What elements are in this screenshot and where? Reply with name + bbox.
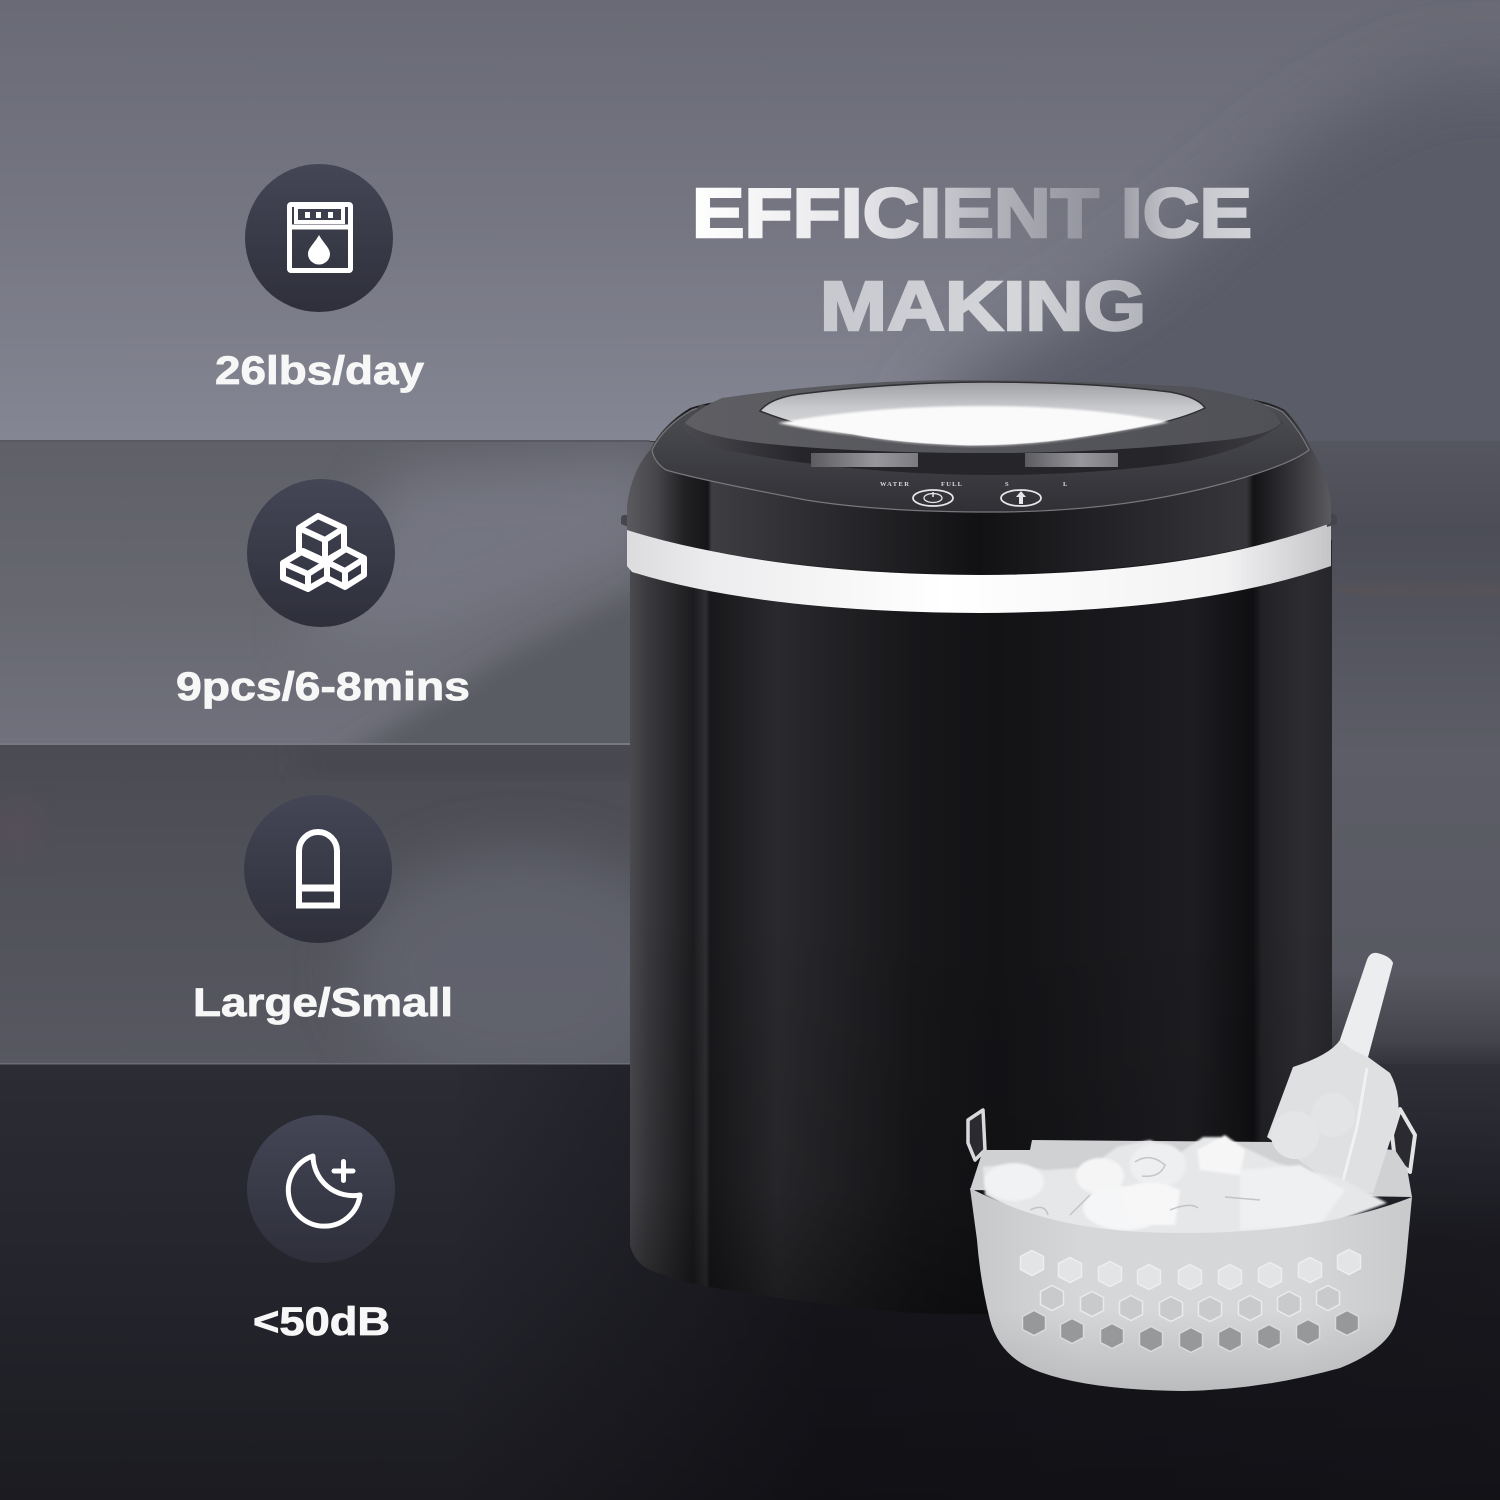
basket lower shading (970, 1188, 1412, 1391)
lid recess (683, 403, 1283, 475)
basket front (970, 1188, 1412, 1391)
feature: cube speed (176, 479, 470, 709)
label: <50dB: <50dB (253, 1300, 390, 1344)
feature: daily output (215, 164, 425, 393)
side clips (621, 514, 1337, 528)
size button (1001, 490, 1041, 506)
label: Large/Small: Large/Small (193, 981, 453, 1025)
icon: bullet-shaped ice (244, 795, 392, 943)
title: EFFICIENT ICE (692, 174, 1252, 252)
basket back rim (970, 1140, 1412, 1197)
title (692, 174, 1252, 345)
hexagon holes (1020, 1250, 1360, 1352)
feature: cube sizes (193, 795, 453, 1025)
raised lid plate (685, 380, 1281, 453)
panel labels: WATER (880, 481, 909, 488)
label: 9pcs/6-8mins: 9pcs/6-8mins (176, 665, 470, 709)
ice inside window (778, 406, 1169, 446)
feature: noise level (247, 1115, 395, 1344)
panel labels: L (1063, 481, 1068, 488)
ice cube highlights (1030, 1158, 1260, 1215)
lower panel (652, 394, 1309, 512)
basket handles (968, 1109, 1415, 1172)
ice cubes (983, 1135, 1387, 1240)
white band (627, 522, 1331, 613)
body shading (630, 900, 1332, 1314)
basket with ice and scoop (968, 953, 1415, 1391)
icon: ice maker with water drop (245, 164, 393, 312)
panel labels: FULL (941, 481, 963, 488)
viewing window (760, 382, 1205, 446)
control panel (880, 481, 1068, 506)
scoop (1267, 953, 1398, 1193)
machine body (630, 540, 1332, 1314)
top collar (627, 392, 1331, 574)
ice maker product (621, 380, 1337, 1314)
lid reflections (811, 453, 918, 467)
title: MAKING (820, 267, 1146, 345)
icon: moon with plus (247, 1115, 395, 1263)
panel labels: S (1005, 481, 1009, 488)
panel labels (880, 481, 1068, 488)
icon: ice cubes (247, 479, 395, 627)
label: 26lbs/day: 26lbs/day (215, 349, 425, 393)
power button (913, 490, 953, 506)
